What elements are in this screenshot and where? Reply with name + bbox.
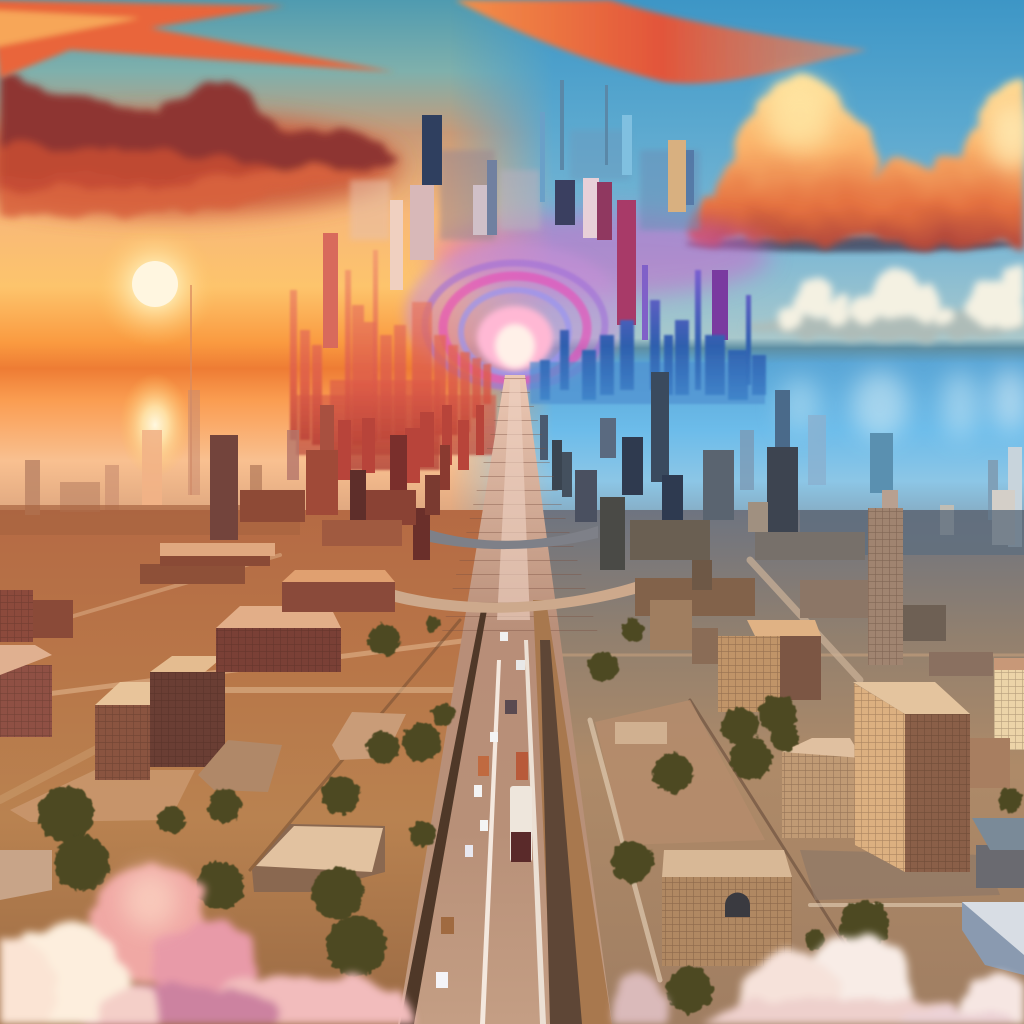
daylight sky and water background <box>457 0 1024 510</box>
distant white clouds on right horizon <box>750 262 1024 339</box>
blue receding skyline <box>530 270 766 404</box>
building: twin block <box>718 620 821 712</box>
right daylight-side distant towers <box>740 390 1024 555</box>
building: rear block <box>282 570 395 612</box>
tree-lined road surface <box>398 375 612 1024</box>
building: plinth block <box>252 824 385 892</box>
ground: warm left side <box>0 510 520 1024</box>
building: large cream tower <box>853 682 970 872</box>
building: mid block <box>782 738 862 838</box>
pavement <box>10 770 195 822</box>
sun reflection on water <box>119 373 191 477</box>
building: central rear group <box>635 560 755 664</box>
building: bottom arched block <box>662 850 792 966</box>
building: large brick block <box>95 656 225 780</box>
vehicles on road <box>436 632 532 988</box>
plaza <box>595 700 765 845</box>
building: far-right cream block <box>994 658 1024 750</box>
building: far-left block <box>0 645 52 737</box>
building: L-shaped flat <box>332 712 406 760</box>
near overpass bridge <box>395 582 635 613</box>
orange streak cloud top centre <box>455 0 868 83</box>
large orange cumulus cloud right <box>685 74 1024 252</box>
pink and white clouds bottom right <box>612 933 1024 1024</box>
building: rear low row <box>755 532 993 676</box>
building: right annex <box>970 738 1010 788</box>
orange-red receding skyline <box>290 250 496 470</box>
building: bottom-right blue block <box>962 902 1024 975</box>
dark mid-distance towers left of road <box>210 405 450 560</box>
pink and white clouds bottom left <box>0 867 410 1024</box>
building: long low block <box>140 543 275 584</box>
right-side buildings <box>595 490 1024 975</box>
far overpass bridge <box>430 526 598 549</box>
dark mid-distance towers right of road <box>540 372 798 570</box>
sun disc <box>132 261 178 307</box>
red clouds top left <box>0 80 400 218</box>
building: corner roof <box>0 850 52 900</box>
kiosk <box>615 722 667 744</box>
sun glow <box>93 223 217 347</box>
water reflections on right <box>780 368 1024 439</box>
building: dark teal block <box>972 818 1024 888</box>
left-side low-rise buildings <box>0 543 406 900</box>
street network <box>0 555 1024 1000</box>
trees <box>38 617 1022 1013</box>
building: top-left block <box>0 590 73 642</box>
building: flat pad <box>198 740 282 792</box>
orange streaks top left corner <box>0 0 395 78</box>
lower promenade <box>800 850 1000 900</box>
ground: cool right side <box>520 510 1024 1024</box>
left sunset-side distant haze towers <box>0 285 300 535</box>
building: central block <box>216 606 341 672</box>
building: tall tan tower <box>868 490 903 665</box>
upper floating skyline <box>323 80 728 348</box>
purple and pink energy swirl <box>405 213 770 387</box>
red mid skyline towers <box>338 405 484 483</box>
